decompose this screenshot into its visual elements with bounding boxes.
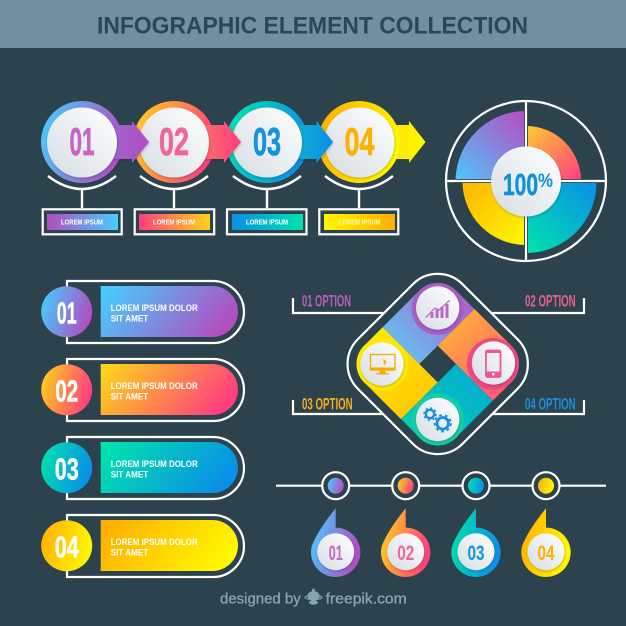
banner 3: SIT AMET <box>111 469 148 480</box>
option labels <box>293 292 584 414</box>
icon: gears <box>412 394 464 446</box>
banner 2: 02 <box>55 373 78 408</box>
banner 3: 03 <box>55 451 79 486</box>
timeline node 4 <box>532 472 560 499</box>
pin 2: 02 <box>397 542 414 565</box>
banner 3 <box>41 437 244 499</box>
step 4: LOREM IPSUM <box>338 219 381 226</box>
banner 4: LOREM IPSUM DOLOR <box>111 537 198 548</box>
banner 2 <box>41 359 244 421</box>
timeline node 2 <box>392 472 419 499</box>
icon: monitor <box>356 338 408 390</box>
panel: timeline <box>276 472 606 499</box>
icon: smartphone <box>467 338 519 390</box>
pin 4 <box>521 508 571 577</box>
icon: freepik mascot <box>305 588 322 605</box>
banner 2: LOREM IPSUM DOLOR <box>111 381 198 392</box>
title: INFOGRAPHIC ELEMENT COLLECTION <box>97 12 528 39</box>
step 2 <box>133 101 241 234</box>
pin 3: 03 <box>468 542 484 565</box>
banner 1: LOREM IPSUM DOLOR <box>111 303 198 314</box>
step 1 <box>41 101 149 234</box>
banner 1: 01 <box>57 295 77 330</box>
step 3: LOREM IPSUM <box>246 219 288 226</box>
pin 3 <box>451 508 501 577</box>
step 4 <box>318 101 426 234</box>
pin 4: 04 <box>538 542 555 565</box>
step 3: 03 <box>253 121 281 164</box>
step 1: 01 <box>70 121 94 164</box>
diamond colour bands <box>356 282 519 436</box>
icon: growth chart <box>412 283 464 335</box>
footer credit <box>220 588 407 607</box>
step 1: LOREM IPSUM <box>61 219 103 226</box>
panel: 100% donut chart <box>446 101 606 261</box>
banner 4: 04 <box>55 529 79 564</box>
option labels: 04 OPTION <box>525 395 576 413</box>
footer credit: freepik.com <box>326 591 407 607</box>
step 2: 02 <box>159 121 189 164</box>
banner 3: LOREM IPSUM DOLOR <box>111 459 198 470</box>
panel: numbered arrow process <box>41 101 426 234</box>
panel: numbered banners <box>41 281 244 577</box>
percent label: % <box>538 171 553 192</box>
timeline node 1 <box>322 472 349 499</box>
step 3 <box>226 101 333 234</box>
banner 2: SIT AMET <box>111 391 148 402</box>
banner 4: SIT AMET <box>111 547 148 558</box>
option labels: 03 OPTION <box>302 395 353 413</box>
header band <box>0 0 626 48</box>
panel: diamond options <box>292 272 586 456</box>
diamond frame <box>333 259 542 469</box>
percent label: 100 <box>503 167 538 202</box>
pin 1 <box>311 508 360 577</box>
step 2: LOREM IPSUM <box>153 219 195 226</box>
pin 2 <box>381 508 430 577</box>
banner 1 <box>41 281 244 343</box>
option labels: 02 OPTION <box>525 292 576 310</box>
option labels: 01 OPTION <box>302 292 351 310</box>
banner 1: SIT AMET <box>111 313 148 324</box>
step 4: 04 <box>344 121 375 164</box>
banner 4 <box>41 515 244 577</box>
timeline node 3 <box>462 472 490 499</box>
pin 1: 01 <box>329 542 343 565</box>
footer credit: designed by <box>220 591 301 607</box>
